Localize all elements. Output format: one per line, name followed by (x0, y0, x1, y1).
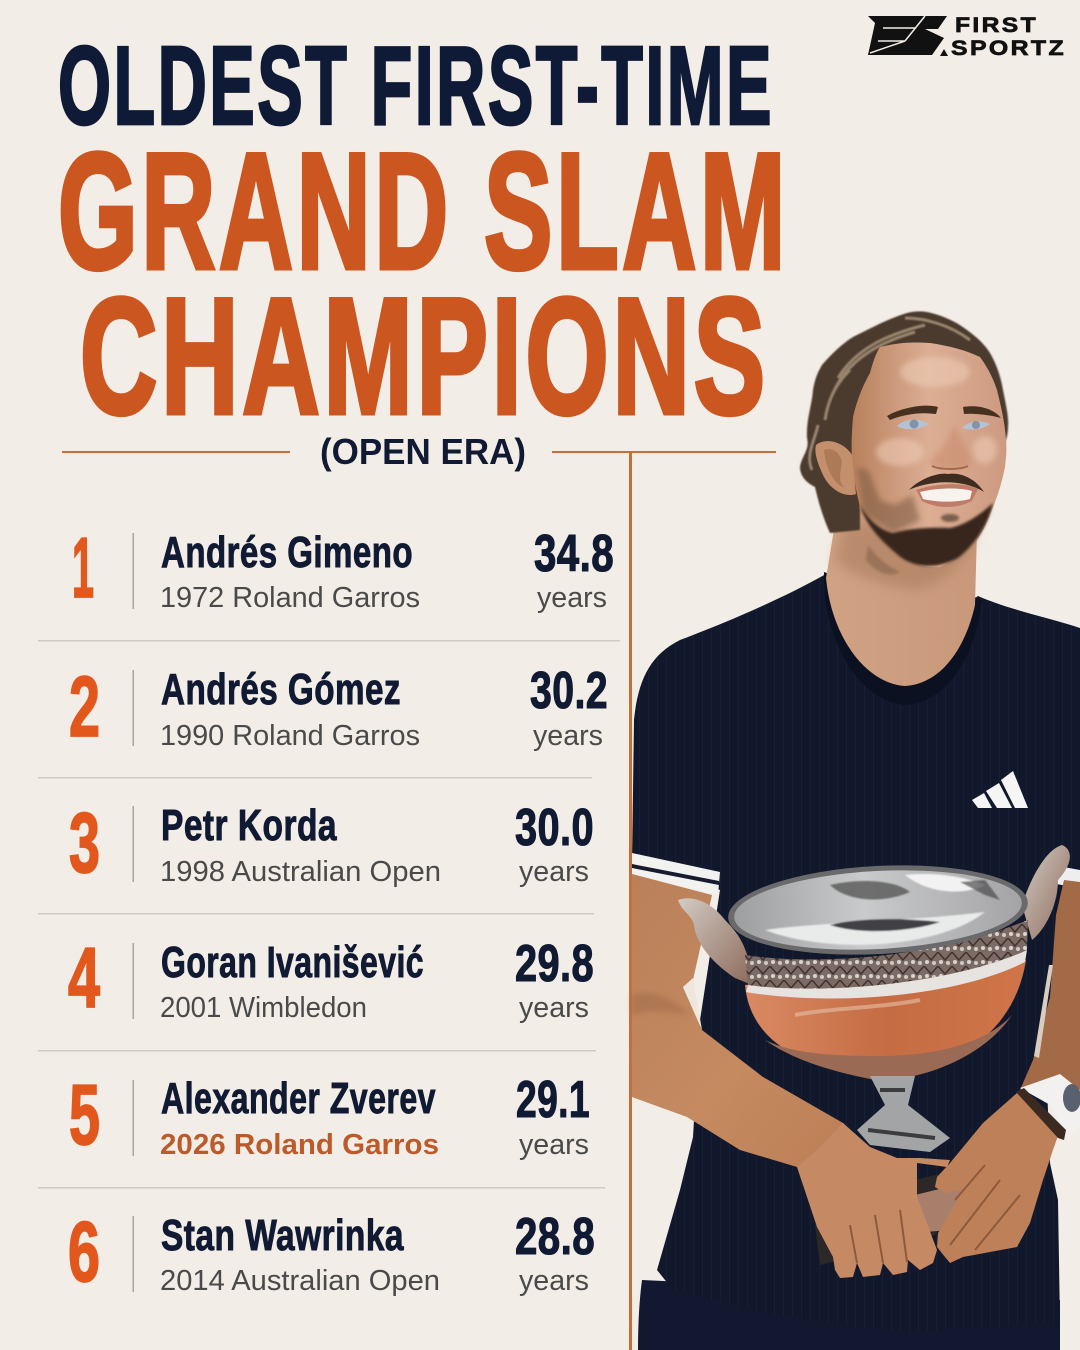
bowl lower trim (765, 1015, 1012, 1081)
row 1: years (537, 582, 607, 614)
title (58, 24, 789, 448)
row 4: 29.8 (515, 935, 594, 993)
row 5: years (519, 1129, 589, 1161)
trophy frieze band (745, 920, 1028, 989)
bowl engraving (795, 1000, 920, 1015)
row 5: 2026 Roland Garros (160, 1129, 439, 1161)
row 2: Andrés Gómez (161, 665, 401, 714)
row 6: years (519, 1265, 589, 1297)
neck shadow (835, 520, 977, 590)
row 2: 30.2 (530, 662, 608, 720)
background gap by left arm (683, 978, 702, 1030)
eyebrows (887, 406, 1001, 420)
logo wordmark: SPORTZ (951, 37, 1066, 60)
neck (826, 505, 977, 686)
eyes (897, 420, 990, 430)
ear inner (824, 449, 845, 488)
panel: ranking list (38, 521, 620, 1300)
icon: adidas logo (972, 771, 1028, 808)
left sleeve band (632, 853, 720, 895)
row 6: 2014 Australian Open (160, 1265, 440, 1297)
row 4: years (519, 992, 589, 1024)
subtitle text: (OPEN ERA) (320, 431, 526, 472)
row 5: 29.1 (516, 1071, 590, 1129)
icon: FS mark (868, 16, 948, 56)
illustration: player holding trophy (632, 311, 1080, 1350)
row 3: 1998 Australian Open (160, 856, 441, 888)
beard (860, 503, 993, 566)
trophy copper bowl (745, 960, 1026, 1075)
watch (1016, 1074, 1080, 1140)
row 2: 1990 Roland Garros (160, 720, 420, 752)
logo wordmark (951, 14, 1066, 60)
row 4: 4 (68, 931, 100, 1026)
trophy stem and foot (857, 1076, 950, 1152)
stubble (857, 467, 920, 533)
interior reflections (765, 874, 1000, 945)
neck stubble (866, 545, 900, 574)
left hand (797, 1123, 950, 1278)
row 1: 1972 Roland Garros (160, 582, 420, 614)
face (852, 342, 1006, 567)
logo wordmark: FIRST (955, 14, 1038, 37)
shirt (632, 574, 1080, 1333)
cheek highlights (876, 357, 997, 466)
row 3: 3 (69, 796, 100, 891)
right arm (1020, 880, 1080, 1100)
shorts (638, 1280, 1060, 1350)
row 3: 30.0 (515, 799, 594, 857)
elbow crease shading (632, 993, 690, 1015)
row 1: 1 (72, 521, 94, 616)
background gap by right arm (1034, 965, 1053, 1058)
row 4: 2001 Wimbledon (160, 992, 367, 1024)
row 1 (72, 521, 614, 616)
trophy left handle (678, 898, 752, 985)
row 2: 2 (69, 660, 100, 755)
row 3: years (519, 856, 589, 888)
row 6 (68, 1205, 595, 1300)
trophy right handle (1022, 845, 1070, 940)
mouth (916, 484, 978, 507)
soul patch (941, 514, 959, 522)
row 3 (69, 796, 594, 891)
right hand (935, 1093, 1060, 1263)
trophy rim ring (746, 950, 1027, 998)
row 5: 5 (69, 1068, 100, 1163)
row 6: 6 (68, 1205, 100, 1300)
left arm (632, 874, 870, 1167)
head (800, 311, 1008, 574)
row 4 (68, 931, 594, 1026)
moustache (909, 474, 984, 492)
row 6: 28.8 (515, 1208, 595, 1266)
shirt collar (824, 572, 982, 705)
row 3: Petr Korda (161, 801, 337, 850)
row 6: Stan Wawrinka (161, 1211, 404, 1260)
logo: First Sportz (868, 14, 1066, 60)
row 1: Andrés Gimeno (161, 528, 413, 577)
trophy (678, 845, 1080, 1278)
row 2 (69, 660, 608, 755)
row 1: 34.8 (534, 525, 614, 583)
trophy plinth (815, 1165, 975, 1265)
row 5 (69, 1068, 590, 1163)
ear (815, 441, 856, 495)
row 2: years (533, 720, 603, 752)
hair highlights (810, 318, 970, 470)
plinth plaque (915, 1182, 968, 1232)
vertical orange divider (629, 452, 632, 1350)
right sleeve band (1056, 866, 1080, 888)
hair (800, 311, 1008, 533)
nose (928, 425, 970, 469)
row 5: Alexander Zverev (161, 1074, 436, 1123)
trophy rim and interior (726, 858, 1030, 962)
row 4: Goran Ivanišević (161, 938, 424, 987)
